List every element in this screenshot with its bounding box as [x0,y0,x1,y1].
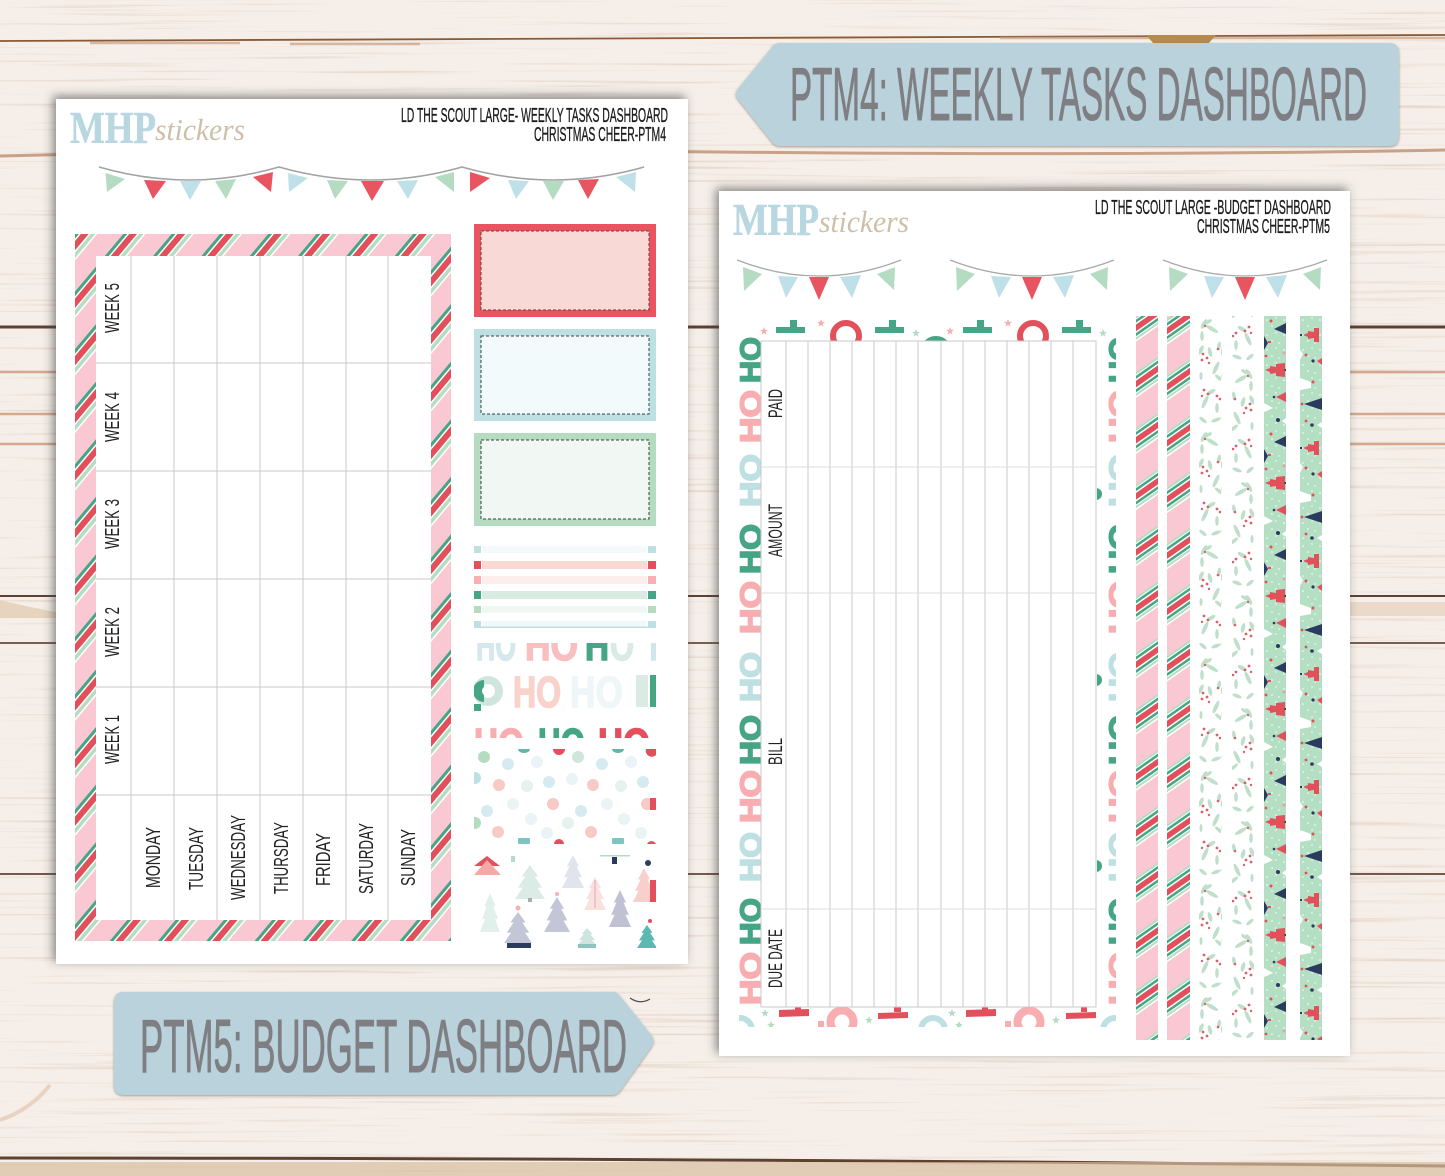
sheet title: LD THE SCOUT LARGE- WEEKLY TASKS DASHBOARD [401,105,668,127]
washi strip: candy stripe two [1167,316,1190,1040]
ho ho frame: right edge: HO [1104,715,1137,765]
ho ho frame: right edge: HO [1104,524,1137,574]
ho ho frame: left edge: HO [735,390,768,443]
ho ho frame: left edge: HO [735,715,768,765]
ho ho frame: left edge [739,338,760,1004]
ho ho frame: left edge: HO [735,337,768,383]
bunting banner [99,167,644,201]
ho ho ho pattern sticker [474,643,656,738]
red label box [474,224,656,317]
week labels [102,283,124,764]
ho ho frame: left edge: HO [735,524,768,574]
ho ho frame: bottom edge [739,1008,1116,1027]
day labels: SATURDAY [356,823,378,894]
ho ho frame: top edge [760,320,1107,340]
christmas trees sticker [474,855,657,948]
column labels [766,389,787,988]
striped bars sticker [474,546,656,628]
ho ho frame: left edge: HO [735,832,768,882]
ho ho frame: right edge [1097,338,1116,1004]
brand logo: MHP [70,103,156,153]
washi strip: holly two [1232,316,1254,1040]
washi strip: candy stripe one [1136,316,1158,1040]
ho ho frame: left edge: HO [735,652,768,702]
bunting one [737,260,901,300]
weekly grid [96,256,431,920]
ho ho frame: left edge: HO [735,454,768,507]
bunting three [1163,260,1327,300]
day labels: THURSDAY [271,822,293,894]
washi strip: holly one [1199,316,1222,1040]
ho ho frame: right edge: HO [1104,898,1137,945]
column labels: DUE DATE [766,929,787,988]
washi strip: mint trees two [1300,316,1322,1040]
day labels: WEDNESDAY [228,815,250,900]
ho ho frame: right edge: HO [1104,390,1137,443]
ho ho frame: left edge: HO [735,898,768,945]
week labels: WEEK 4 [102,392,124,442]
week labels: WEEK 1 [102,715,124,764]
ho ho frame: right edge: HO [1104,454,1137,507]
ho ho frame: left edge: HO [735,952,768,1005]
budget grid [761,341,1096,1007]
ho ho ho pattern sticker: HO [525,621,578,670]
sticker sheet: budget dashboard (PTM5) [719,191,1350,1056]
brand logo [70,103,245,153]
sheet title [401,105,668,146]
ho ho frame: right edge: HO [1104,952,1137,1005]
column labels: BILL [766,738,787,765]
text: PTM5: BUDGET DASHBOARD [140,1004,627,1088]
small wood mark [630,998,650,1002]
sheet title [1095,197,1331,238]
ho ho frame: right edge: HO [1104,832,1137,882]
washi strip: mint trees one [1264,316,1286,1040]
day labels [143,815,420,900]
ho ho ho pattern sticker: H [649,621,679,670]
bunting two [950,260,1114,300]
ho ho frame: right edge: HO [1104,337,1137,383]
brand logo: stickers [155,112,245,147]
striped frame [75,234,451,941]
week labels: WEEK 5 [102,283,124,333]
day labels: FRIDAY [313,833,335,886]
ho ho ho pattern sticker: HO [598,720,650,769]
brand logo [733,195,909,245]
column labels: PAID [766,389,787,418]
day labels: MONDAY [143,827,165,888]
ho ho frame: right edge: HO [1104,581,1137,634]
ho ho frame: left edge: HO [735,581,768,634]
week labels: WEEK 3 [102,499,124,549]
brand logo: stickers [819,204,909,239]
ho ho ho pattern sticker: H [585,621,609,670]
ho ho ho pattern sticker: HO [538,720,585,769]
day labels: SUNDAY [398,829,420,886]
ho ho ho pattern sticker: O [610,621,634,670]
sheet title: CHRISTMAS CHEER-PTM5 [1197,216,1330,238]
week labels: WEEK 2 [102,607,124,657]
day labels: TUESDAY [186,827,208,890]
sheet title: CHRISTMAS CHEER-PTM4 [534,124,666,146]
ho ho ho pattern sticker: HO [513,668,561,717]
column labels: AMOUNT [766,504,787,557]
ho ho ho pattern sticker: HO [474,720,524,769]
brand logo: MHP [733,195,819,245]
polka dot sticker [469,749,656,844]
ho ho frame: left edge: HO [735,770,768,823]
sticker sheet: weekly tasks dashboard (PTM4) [56,99,688,964]
ho ho ho pattern sticker: HO [476,621,516,670]
green label box [474,433,656,526]
banner: PTM5 budget dashboard [114,992,654,1095]
ho ho frame: right edge: HO [1104,770,1137,823]
ho ho ho pattern sticker: HO [570,668,623,717]
blue label box [474,329,656,421]
wood knot [1146,35,1216,44]
ho ho frame: right edge: HO [1104,652,1137,702]
